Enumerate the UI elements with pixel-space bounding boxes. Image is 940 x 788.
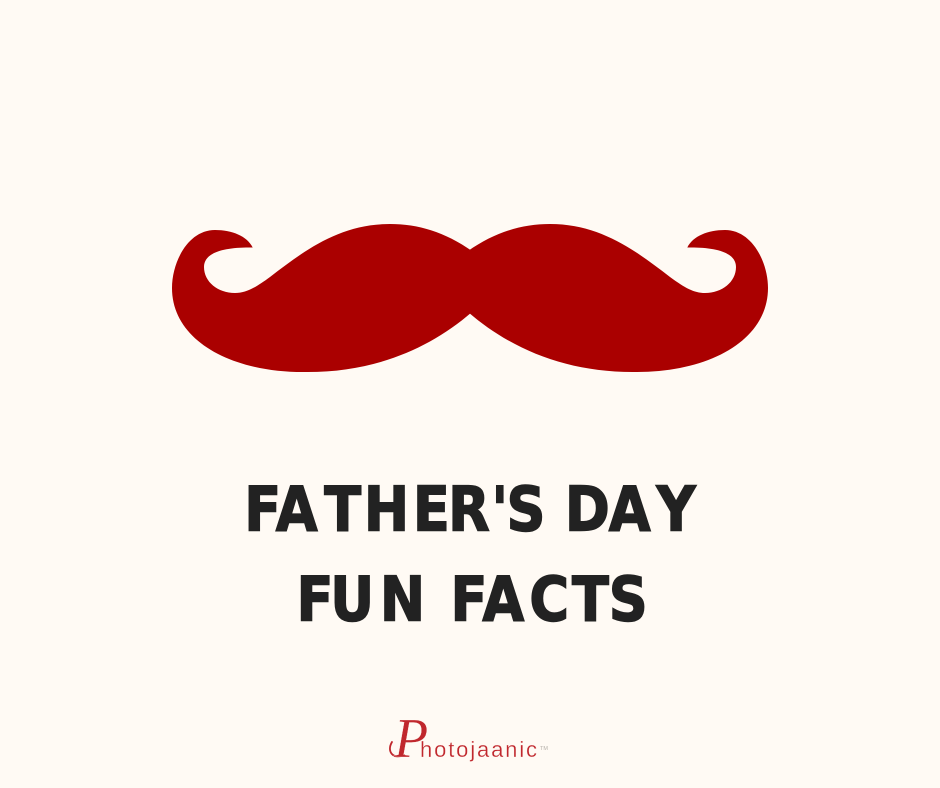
- logo: Photojaanic: hotojaanic: [420, 737, 537, 762]
- logo: Photojaanic: [390, 708, 548, 770]
- icon: red moustache: [172, 224, 768, 372]
- title: [244, 473, 697, 635]
- title: FUN FACTS: [296, 563, 648, 635]
- logo: Photojaanic: P: [393, 708, 428, 770]
- logo: Photojaanic: TM: [540, 746, 548, 752]
- title: FATHER'S DAY: [244, 473, 697, 545]
